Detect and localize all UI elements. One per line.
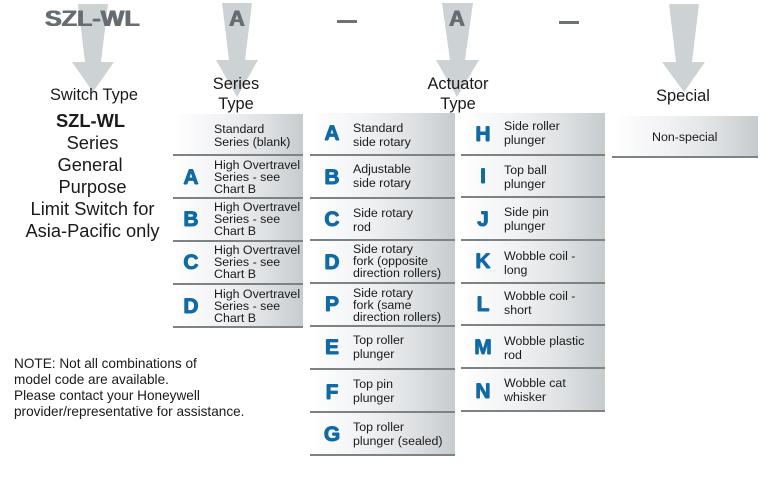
row: G: [310, 413, 455, 456]
row: series A: High Overtravel: [214, 158, 300, 172]
row: M: Wobble plastic: [504, 334, 584, 348]
row: I: plunger: [504, 177, 545, 191]
row: N: N: [475, 380, 491, 403]
row: K: Wobble coil -: [504, 249, 575, 263]
row: P: [310, 284, 455, 327]
note: provider/representative for assistance.: [14, 404, 244, 419]
row: series A: A: [183, 166, 199, 189]
row: F: [310, 370, 455, 413]
row: series C: [173, 242, 303, 285]
row: F: plunger: [353, 391, 394, 405]
row: H: plunger: [504, 132, 545, 146]
row: D: direction rollers): [353, 266, 441, 280]
row: D: Side rotary: [353, 242, 413, 256]
model code: series A: A: [229, 6, 245, 31]
row: A: [310, 113, 455, 156]
row: G: plunger (sealed): [353, 434, 443, 448]
row: standard series: Series (blank): [214, 134, 290, 148]
row: series D: [173, 285, 303, 328]
text block: switch description: Asia-Pacific only: [25, 220, 160, 241]
row: K: K: [475, 250, 491, 273]
row: B: B: [324, 166, 340, 189]
text block: switch description: SZL-WL: [56, 110, 125, 131]
row: H: [461, 113, 605, 156]
row: G: Top roller: [353, 420, 404, 434]
row: J: plunger: [504, 219, 545, 233]
row: series C: C: [183, 251, 199, 274]
row: B: Adjustable: [353, 162, 411, 176]
text block: switch description: [25, 110, 160, 241]
row: series B: [173, 199, 303, 242]
panel: actuator type column 2: [461, 113, 605, 412]
row: series D: Series - see: [214, 299, 280, 313]
note: NOTE: Not all combinations of: [14, 356, 197, 371]
row: J: Side pin: [504, 205, 549, 219]
row: C: [310, 199, 455, 241]
note: Please contact your Honeywell: [14, 388, 200, 403]
panel: actuator type column 1: [310, 113, 455, 456]
heading: switch type: Switch Type: [50, 86, 138, 104]
row: series B: High Overtravel: [214, 200, 300, 214]
row: K: long: [504, 263, 527, 277]
model code: dash: [337, 20, 357, 23]
row: I: [461, 156, 605, 198]
row: series D: High Overtravel: [214, 287, 300, 301]
row: E: [310, 327, 455, 370]
row: E: E: [325, 336, 339, 359]
row: P: fork (same: [353, 298, 412, 312]
heading: series type: Series: [213, 75, 259, 93]
row: series D: D: [183, 295, 199, 318]
text block: switch description: Limit Switch for: [31, 198, 154, 219]
row: L: [461, 284, 605, 326]
row: series A: Chart B: [214, 182, 256, 196]
row: A: side rotary: [353, 134, 411, 148]
row: P: Side rotary: [353, 286, 413, 300]
row: D: D: [324, 251, 340, 274]
model code: SZL-WL: SZL-WL: [45, 6, 140, 31]
row: D: [310, 241, 455, 284]
heading: actuator type: [427, 75, 489, 112]
note: model code are available.: [14, 372, 169, 387]
row: M: rod: [504, 348, 522, 362]
row: series B: Chart B: [214, 224, 256, 238]
panel: special: [612, 116, 758, 158]
row: K: [461, 241, 605, 284]
heading: special: Special: [656, 87, 710, 105]
row: C: rod: [353, 220, 371, 234]
model code: dash: [559, 21, 579, 24]
row: M: [461, 326, 605, 369]
row: E: Top roller: [353, 333, 404, 347]
row: series C: Series - see: [214, 255, 280, 269]
heading: actuator type: Type: [440, 94, 476, 112]
row: F: F: [326, 381, 338, 404]
row: A: Standard: [353, 120, 403, 134]
row: F: Top pin: [353, 377, 393, 391]
row: I: Top ball: [504, 163, 547, 177]
row: J: [461, 198, 605, 241]
model code: actuator A: A: [449, 6, 465, 31]
row: B: [310, 156, 455, 199]
row: series C: High Overtravel: [214, 243, 300, 257]
row: C: C: [324, 208, 340, 231]
row: H: Side roller: [504, 118, 560, 132]
row: I: I: [480, 165, 486, 188]
row: N: Wobble cat: [504, 376, 566, 390]
heading: series type: Type: [218, 94, 254, 112]
row: D: fork (opposite: [353, 254, 428, 268]
panel: series type: [173, 114, 303, 328]
row: E: plunger: [353, 347, 394, 361]
row: B: side rotary: [353, 176, 411, 190]
row: G: G: [324, 423, 340, 446]
row: P: P: [325, 293, 339, 316]
panel: special: Non-special: [652, 130, 717, 144]
row: series D: Chart B: [214, 311, 256, 325]
row: N: whisker: [504, 390, 546, 404]
heading: actuator type: Actuator: [427, 75, 489, 93]
row: P: direction rollers): [353, 310, 441, 324]
row: L: Wobble coil -: [504, 289, 575, 303]
row: series B: Series - see: [214, 212, 280, 226]
row: series C: Chart B: [214, 267, 256, 281]
row: L: short: [504, 303, 532, 317]
row: series A: Series - see: [214, 170, 280, 184]
row: series A: [173, 156, 303, 199]
row: A: A: [324, 122, 340, 145]
row: C: Side rotary: [353, 206, 413, 220]
row: J: J: [477, 208, 489, 231]
text block: switch description: Series: [67, 132, 118, 153]
row: N: [461, 369, 605, 412]
row: L: L: [477, 293, 489, 316]
note: [14, 356, 244, 419]
row: M: M: [474, 336, 492, 359]
row: standard series: Standard: [214, 122, 264, 136]
row: series B: B: [183, 208, 199, 231]
row: H: H: [475, 123, 491, 146]
heading: series type: [213, 75, 259, 112]
text block: switch description: Purpose: [58, 176, 127, 197]
row: standard series: [173, 114, 303, 156]
text block: switch description: General: [57, 154, 123, 175]
